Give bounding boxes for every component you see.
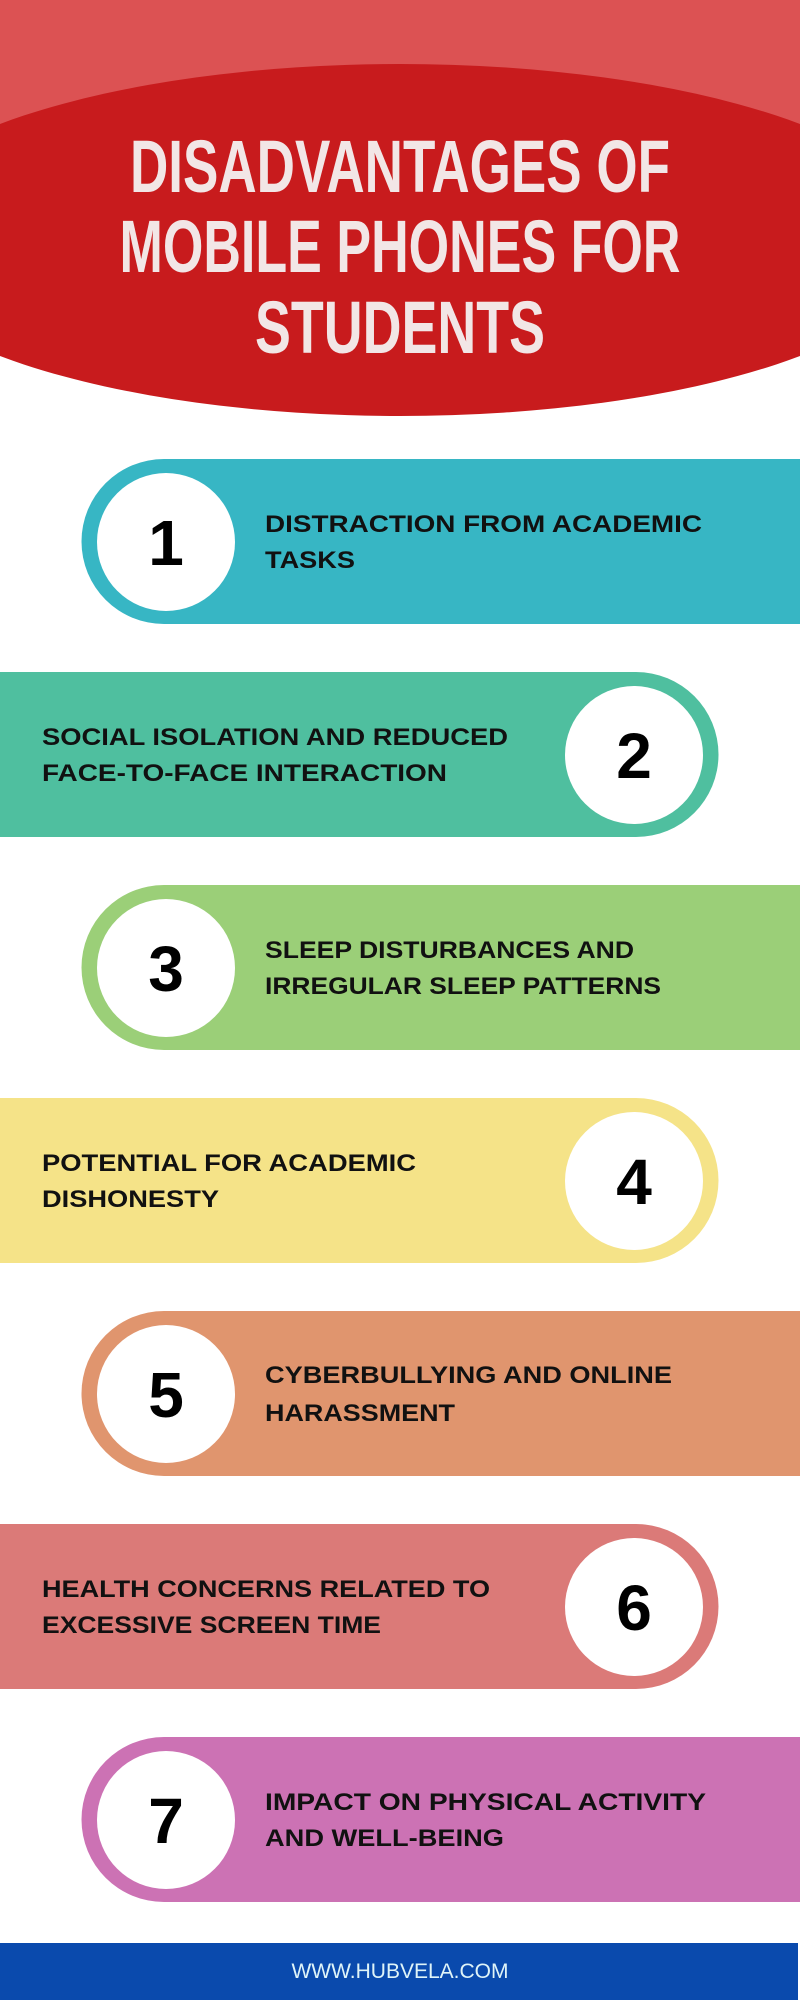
- row 4: POTENTIAL FOR ACADEMIC: [42, 1150, 416, 1177]
- row 5: 5: [148, 1359, 184, 1431]
- title: [120, 125, 680, 369]
- row 7: IMPACT ON PHYSICAL ACTIVITY: [265, 1789, 706, 1816]
- row 1: [81, 459, 800, 624]
- footer: [0, 1943, 798, 2000]
- row 2: [0, 672, 718, 837]
- row 4: [0, 1098, 718, 1263]
- row 5: [81, 1311, 800, 1476]
- row 4: 4: [616, 1146, 652, 1218]
- row 6: [0, 1524, 718, 1689]
- row 3: IRREGULAR SLEEP PATTERNS: [265, 973, 661, 1000]
- row 3: 3: [148, 933, 184, 1005]
- row 7: 7: [148, 1785, 184, 1857]
- footer: WWW.HUBVELA.COM: [291, 1960, 509, 1983]
- row 3: SLEEP DISTURBANCES AND: [265, 937, 634, 964]
- row 5: HARASSMENT: [265, 1400, 455, 1427]
- row 1: 1: [148, 507, 184, 579]
- row 2: 2: [616, 720, 652, 792]
- header background: [0, 0, 800, 240]
- row 7: AND WELL-BEING: [265, 1825, 504, 1852]
- row 6: 6: [616, 1572, 652, 1644]
- row 2: SOCIAL ISOLATION AND REDUCED: [42, 724, 508, 751]
- title: STUDENTS: [255, 286, 545, 369]
- header ellipse: [0, 64, 800, 416]
- row 5: CYBERBULLYING AND ONLINE: [265, 1362, 672, 1389]
- row 1: TASKS: [265, 547, 355, 574]
- row 4: DISHONESTY: [42, 1186, 219, 1213]
- row 3: [81, 885, 800, 1050]
- row 6: HEALTH CONCERNS RELATED TO: [42, 1576, 490, 1603]
- row 7: [81, 1737, 800, 1902]
- row 2: FACE-TO-FACE INTERACTION: [42, 760, 447, 787]
- row 6: EXCESSIVE SCREEN TIME: [42, 1612, 381, 1639]
- row 1: DISTRACTION FROM ACADEMIC: [265, 511, 702, 538]
